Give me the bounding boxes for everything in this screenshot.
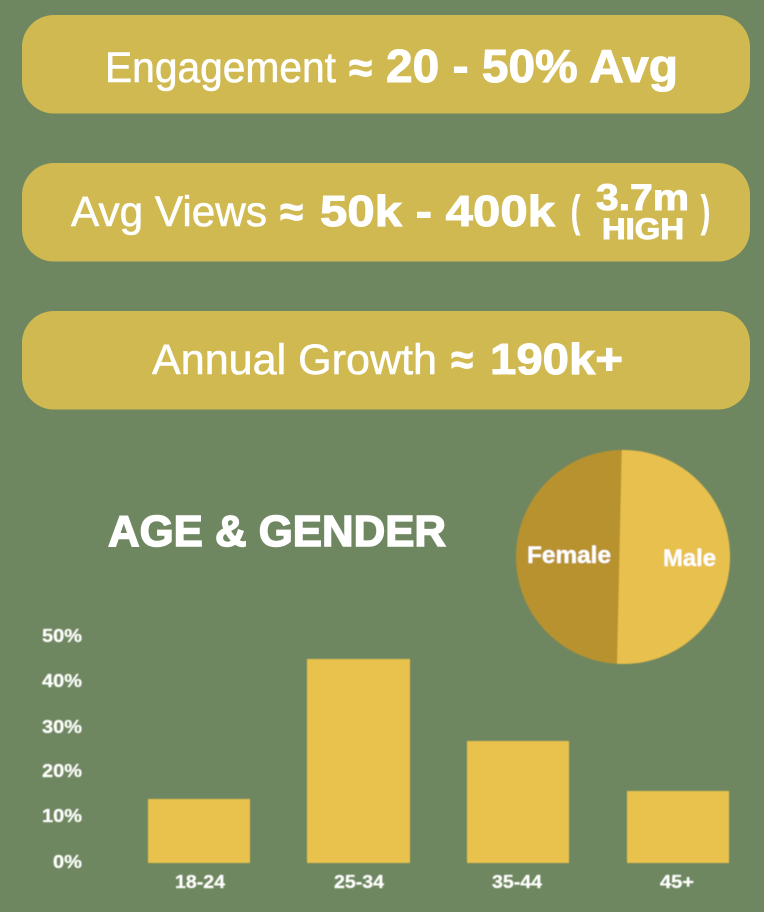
x axis labels — [175, 871, 694, 892]
bar: 35-44 — [467, 741, 569, 863]
stat pill: average views: 3.7m — [596, 177, 689, 218]
stat pill: annual growth — [22, 311, 750, 410]
bar chart: age distribution — [42, 625, 729, 892]
bar: 45+ — [627, 791, 729, 863]
stat pill: engagement — [22, 15, 750, 114]
y axis labels — [42, 625, 82, 872]
pie chart: gender split — [516, 440, 740, 670]
stat pill: engagement: 20 - 50% Avg — [386, 40, 678, 92]
stat pill: average views: ( — [571, 187, 580, 236]
bar: 25-34 — [307, 659, 410, 863]
stat pill: annual growth: Annual Growth — [152, 336, 437, 384]
stat pill: engagement: ≈ — [349, 44, 372, 91]
x axis labels: 35-44 — [492, 871, 543, 892]
stat pill: average views — [22, 163, 750, 262]
x axis labels: 18-24 — [175, 871, 226, 892]
pie chart: gender split: Male — [663, 545, 716, 572]
y axis labels: 30% — [42, 716, 82, 737]
stat pill: average views: ≈ — [280, 188, 303, 235]
stat pill: average views: 50k - 400k — [320, 187, 556, 236]
stat pill: engagement: Engagement — [105, 44, 336, 92]
pie chart: gender split: Female — [527, 542, 611, 569]
stat pill: average views: Avg Views — [71, 188, 267, 236]
y axis labels: 40% — [42, 670, 82, 691]
stat pill: average views: HIGH — [602, 213, 684, 246]
y axis labels: 20% — [42, 760, 82, 781]
y axis labels: 0% — [53, 851, 82, 872]
x axis labels: 25-34 — [334, 871, 385, 892]
x axis labels: 45+ — [660, 871, 694, 892]
stat pill: annual growth: ≈ — [451, 336, 473, 383]
stat pill: annual growth: 190k+ — [490, 335, 623, 384]
heading: age and gender: AGE & GENDER — [108, 507, 446, 556]
bar: 18-24 — [148, 799, 250, 863]
y axis labels: 10% — [42, 805, 82, 826]
y axis labels: 50% — [42, 625, 82, 646]
stat pill: average views: ) — [701, 187, 710, 236]
